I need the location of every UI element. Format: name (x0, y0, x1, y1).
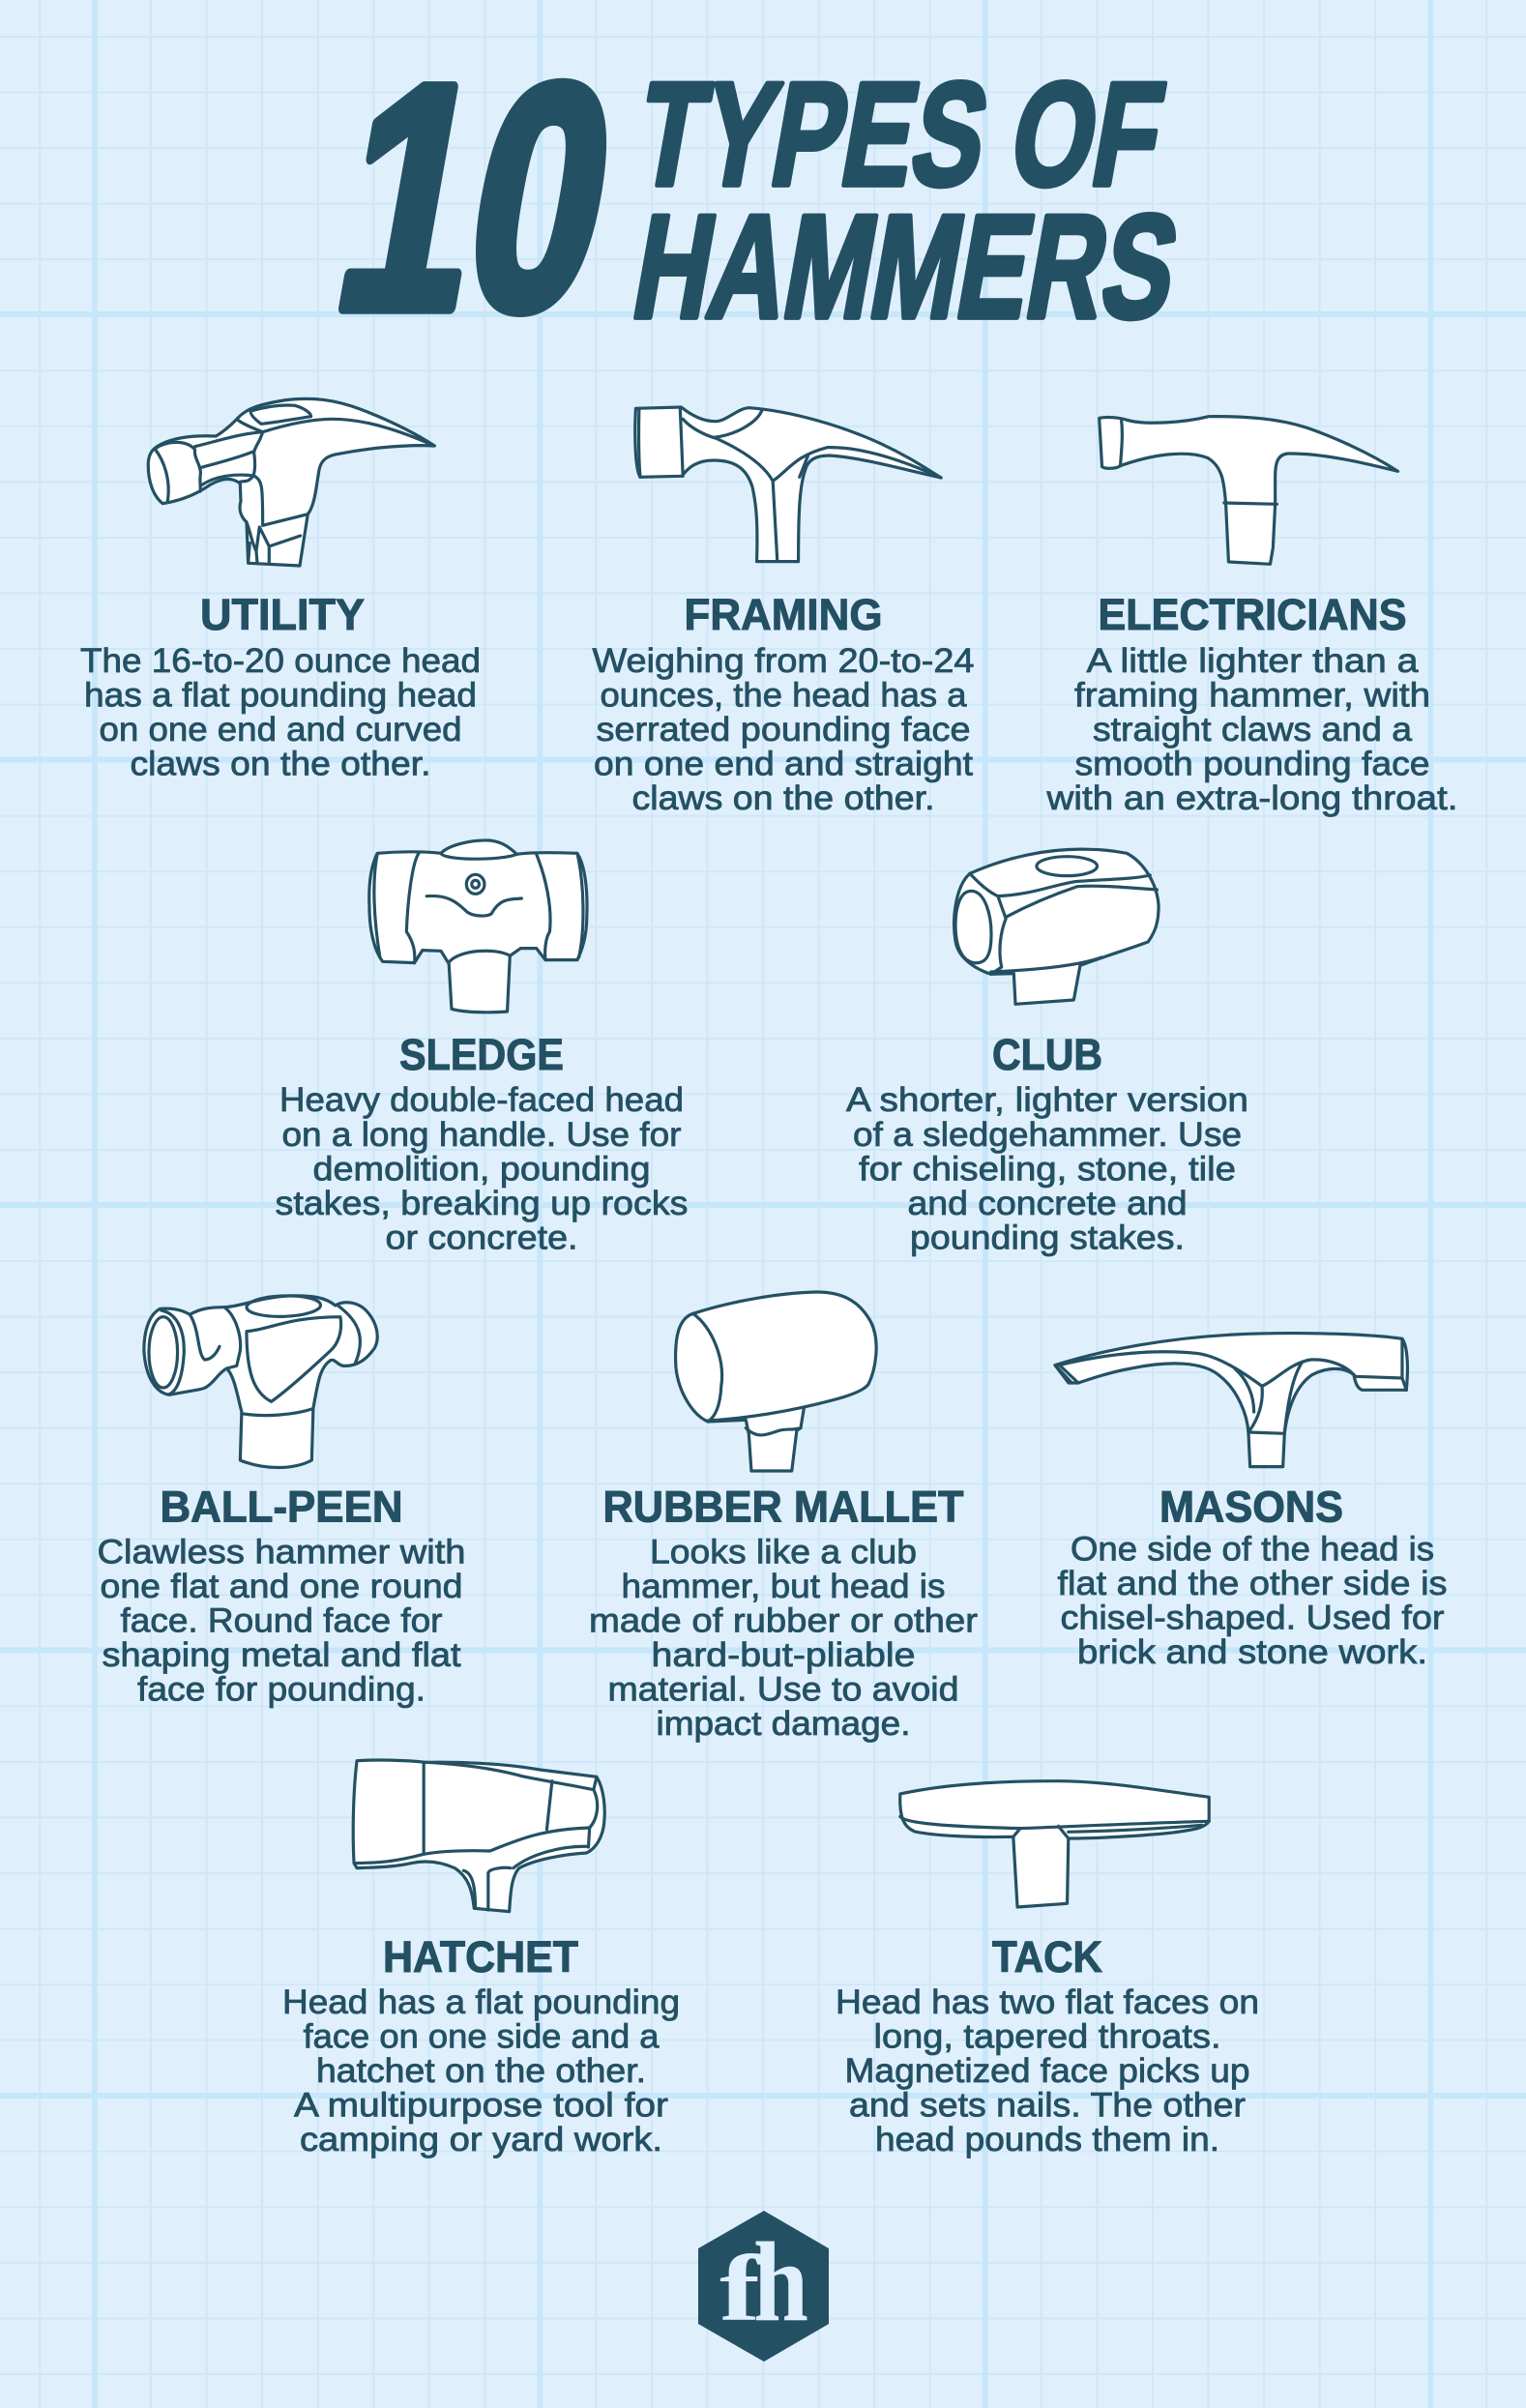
icon: ball-peen hammer (144, 1295, 377, 1467)
description: utility (80, 642, 481, 783)
description: masons (1058, 1530, 1447, 1671)
description: electricians: smooth pounding face (1075, 745, 1429, 783)
icon: utility hammer (148, 398, 434, 566)
description: club: pounding stakes. (910, 1219, 1185, 1257)
description: club (846, 1081, 1248, 1257)
description: hatchet: face on one side and a (304, 2017, 660, 2056)
logo: fh hexagon: h (753, 2218, 808, 2345)
description: club: for chiseling, stone, tile (859, 1151, 1236, 1188)
description: rubber mallet: hammer, but head is (621, 1568, 946, 1605)
logo: fh hexagon (698, 2211, 829, 2362)
description: ball-peen: Clawless hammer with (97, 1534, 466, 1571)
title (317, 18, 1189, 375)
description: rubber mallet: material. Use to avoid (607, 1671, 959, 1708)
title line: types of: TYPES OF (627, 52, 1175, 217)
description: tack (836, 1983, 1259, 2158)
description: sledge (275, 1081, 689, 1257)
description: hatchet: camping or yard work. (300, 2121, 662, 2158)
card: club (846, 849, 1248, 1257)
icon: rubber mallet (676, 1292, 876, 1471)
description: ball-peen: shaping metal and flat (103, 1636, 461, 1674)
description: masons: One side of the head is (1071, 1530, 1434, 1569)
description: tack: long, tapered throats. (874, 2017, 1220, 2056)
heading: tack: TACK (992, 1932, 1102, 1982)
heading: sledge: SLEDGE (399, 1030, 564, 1079)
description: electricians: framing hammer, with (1074, 677, 1430, 714)
description: hatchet: A multipurpose tool for (294, 2087, 668, 2124)
card: rubber mallet (589, 1292, 978, 1743)
description: tack: head pounds them in. (875, 2121, 1219, 2158)
description: sledge: or concrete. (385, 1219, 578, 1257)
description: tack: Head has two flat faces on (836, 1983, 1259, 2021)
logo: fh hexagon: f (719, 2237, 762, 2341)
description: utility: claws on the other. (130, 745, 430, 783)
description: framing (592, 642, 975, 817)
heading: utility: UTILITY (200, 590, 365, 639)
card: masons (1055, 1334, 1447, 1671)
description: rubber mallet: hard-but-pliable (652, 1636, 915, 1674)
description: framing: serrated pounding face (596, 711, 971, 749)
description: club: A shorter, lighter version (846, 1081, 1248, 1119)
card: utility (80, 398, 481, 783)
icon: tack hammer (900, 1781, 1209, 1907)
card: electricians (1045, 417, 1458, 817)
description: rubber mallet: made of rubber or other (589, 1601, 978, 1640)
description: electricians: straight claws and a (1093, 711, 1413, 749)
description: ball-peen: one flat and one round (101, 1568, 462, 1605)
card: hatchet (282, 1760, 680, 2158)
icon: hatchet (353, 1760, 604, 1912)
title line: hammers: HAMMERS (623, 186, 1189, 349)
description: hatchet: Head has a flat pounding (282, 1983, 680, 2021)
description: utility: has a flat pounding head (84, 677, 477, 714)
description: electricians (1045, 642, 1458, 817)
heading: electricians: ELECTRICIANS (1099, 590, 1406, 639)
description: tack: and sets nails. The other (849, 2087, 1246, 2124)
heading: club: CLUB (992, 1030, 1102, 1079)
description: ball-peen (97, 1534, 466, 1708)
description: tack: Magnetized face picks up (845, 2052, 1249, 2090)
description: rubber mallet: Looks like a club (650, 1534, 917, 1571)
description: sledge: Heavy double-faced head (279, 1081, 684, 1119)
icon: framing hammer (635, 407, 941, 562)
description: sledge: stakes, breaking up rocks (275, 1185, 689, 1222)
description: hatchet: hatchet on the other. (316, 2052, 646, 2090)
description: masons: flat and the other side is (1058, 1565, 1447, 1602)
icon: sledge hammer (369, 840, 587, 1013)
description: framing: claws on the other. (632, 779, 934, 817)
heading: framing: FRAMING (685, 590, 882, 639)
heading: ball-peen: BALL-PEEN (161, 1482, 402, 1532)
heading: masons: MASONS (1159, 1482, 1343, 1532)
description: masons: brick and stone work. (1077, 1633, 1427, 1671)
card: tack (836, 1781, 1259, 2158)
icon: electricians hammer (1100, 417, 1398, 564)
description: ball-peen: face for pounding. (137, 1671, 426, 1708)
description: framing: Weighing from 20-to-24 (592, 642, 975, 680)
description: club: of a sledgehammer. Use (853, 1116, 1242, 1154)
description: electricians: A little lighter than a (1087, 642, 1419, 680)
description: framing: ounces, the head has a (600, 677, 967, 714)
card: framing (592, 407, 975, 817)
icon: masons hammer (1055, 1334, 1407, 1467)
description: utility: The 16-to-20 ounce head (80, 642, 481, 680)
description: hatchet (282, 1983, 680, 2158)
description: rubber mallet: impact damage. (656, 1705, 911, 1743)
description: ball-peen: face. Round face for (120, 1601, 443, 1640)
description: utility: on one end and curved (99, 711, 462, 749)
description: electricians: with an extra-long throat. (1045, 779, 1458, 817)
description: sledge: on a long handle. Use for (282, 1116, 682, 1154)
icon: club hammer (954, 849, 1159, 1004)
title number 10: 10 (317, 18, 637, 375)
card: ball-peen (97, 1295, 466, 1708)
description: framing: on one end and straight (594, 745, 973, 783)
description: club: and concrete and (907, 1185, 1188, 1222)
description: rubber mallet (589, 1534, 978, 1743)
description: sledge: demolition, pounding (313, 1151, 650, 1188)
heading: hatchet: HATCHET (383, 1932, 578, 1982)
card: sledge (275, 840, 689, 1257)
description: masons: chisel-shaped. Used for (1060, 1600, 1445, 1636)
heading: rubber mallet: RUBBER MALLET (603, 1482, 963, 1532)
